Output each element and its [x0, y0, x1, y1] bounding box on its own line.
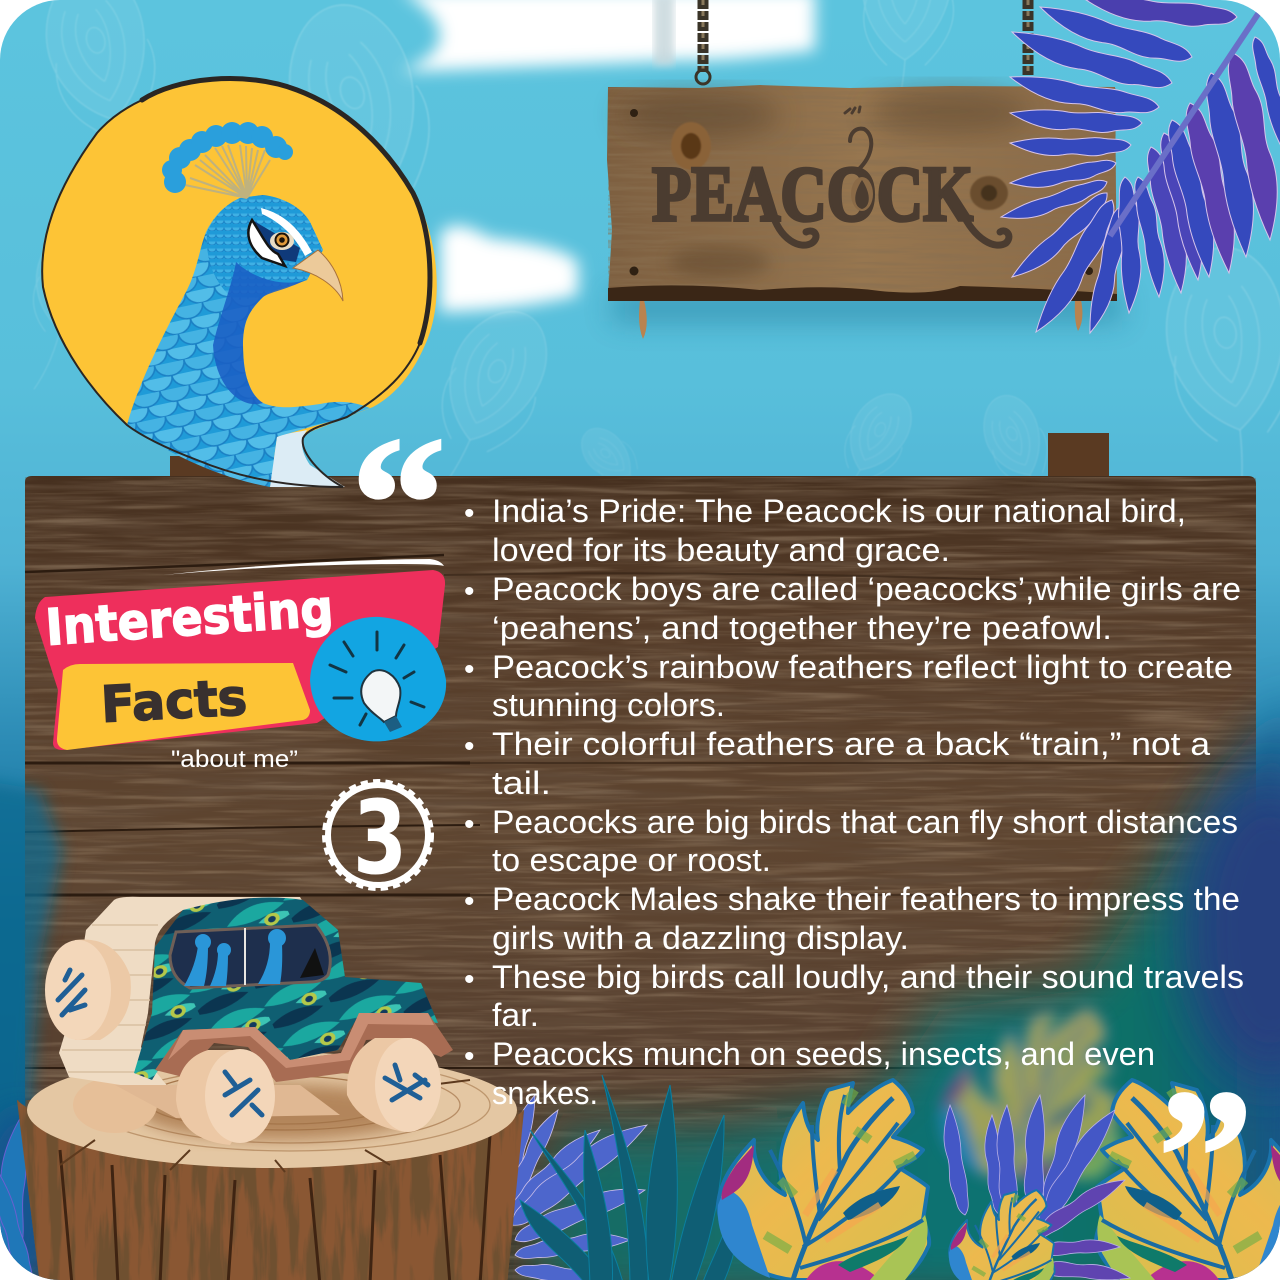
- hanging sign: [607, 0, 1122, 339]
- wheel emblem: [225, 1072, 262, 1115]
- yellow banner: [57, 663, 310, 750]
- fact four: tail.: [492, 765, 551, 801]
- body ribs: [62, 925, 158, 1072]
- about me caption: "about me”: [171, 746, 298, 773]
- peacock body: [127, 195, 370, 487]
- fact six: girls with a dazzling display.: [492, 920, 909, 956]
- lower chassis: [115, 1085, 340, 1118]
- panel grain: [25, 477, 1256, 1280]
- wheel emblem: [385, 1065, 428, 1100]
- tree stump: [10, 1052, 530, 1280]
- fact seven: •: [464, 963, 475, 996]
- feather wrap: [134, 898, 438, 1080]
- white flourish: [163, 559, 444, 575]
- window peacocks: [184, 929, 286, 986]
- middle frond: [939, 1091, 1131, 1280]
- fact six: [464, 881, 1240, 956]
- head scales: [207, 195, 323, 300]
- panel colour fades: [0, 780, 62, 1280]
- number: 3: [353, 779, 407, 898]
- opening quote mark: “: [351, 399, 446, 609]
- palm leaf top right: [999, 0, 1280, 339]
- fact one: India’s Pride: The Peacock is our national bird,: [492, 493, 1186, 529]
- fact two: •: [464, 575, 475, 608]
- heading word one: Interesting: [44, 579, 335, 657]
- fact five: to escape or roost.: [492, 842, 771, 878]
- closing quote mark: ”: [1158, 1052, 1253, 1262]
- fact five: Peacocks are big birds that can fly short distances: [492, 804, 1238, 840]
- left frond: [0, 1118, 32, 1274]
- small centre leaf: [949, 1190, 1055, 1280]
- wood knots: [630, 109, 1093, 276]
- heading word two: Facts: [100, 668, 248, 734]
- fact two: ‘peahens’, and together they’re peafowl.: [492, 610, 1112, 646]
- outline: [42, 79, 430, 487]
- face mask: [248, 208, 312, 266]
- wing belly: [270, 430, 345, 487]
- bulb icon: [310, 617, 446, 741]
- blurred background monstera: [940, 1008, 1120, 1178]
- fact seven: These big birds call loudly, and their sound travels: [492, 959, 1244, 995]
- fact five: [464, 804, 1238, 878]
- board burns: [608, 285, 1117, 301]
- clouds: [400, 0, 815, 312]
- cloud post shadow: [654, 0, 674, 65]
- fact four: [464, 726, 1210, 801]
- fact eight: [464, 1036, 1155, 1111]
- monstera right: [1096, 1080, 1280, 1280]
- monstera left: [718, 1080, 929, 1280]
- fact three: •: [464, 653, 475, 686]
- fact six: •: [464, 885, 475, 918]
- fact one: •: [464, 497, 475, 530]
- rear wheel: [176, 1049, 275, 1145]
- fact three: [464, 649, 1233, 723]
- wood posts: [170, 433, 1109, 480]
- blue frond: [512, 1096, 648, 1280]
- sign shadow: [612, 292, 1122, 322]
- fact two: Peacock boys are called ‘peacocks’,while girls are: [492, 571, 1241, 607]
- wooden toy car: [45, 897, 453, 1145]
- sign title: PEACOCK: [652, 150, 973, 237]
- panel base: [25, 476, 1256, 1280]
- peacock speech bubble: [42, 79, 437, 487]
- bark texture: [10, 1095, 530, 1280]
- dark agave: [520, 1075, 738, 1280]
- warm stump shadow: [140, 1084, 420, 1140]
- bottom foliage: [0, 1075, 1280, 1280]
- neck shading: [213, 262, 306, 404]
- fact four: Their colorful feathers are a back “train,” not a: [492, 726, 1210, 762]
- fact two: [464, 571, 1241, 646]
- fact seven: far.: [492, 997, 539, 1033]
- front wheel: [347, 1038, 441, 1132]
- plank lines: [25, 555, 1256, 1068]
- fact eight: Peacocks munch on seeds, insects, and even: [492, 1036, 1155, 1072]
- wheel emblem: [58, 970, 85, 1015]
- heading badge: [35, 559, 446, 773]
- wood board: [607, 85, 1117, 300]
- number badge: [326, 779, 430, 898]
- growth rings: [60, 1059, 490, 1172]
- trunk: [17, 1100, 524, 1280]
- beak: [293, 250, 343, 301]
- title swashes and peacock mark: [772, 107, 1009, 245]
- sign drips: [639, 300, 1082, 339]
- brown rail: [155, 1013, 453, 1082]
- fact five: •: [464, 808, 475, 841]
- stump top: [27, 1052, 517, 1168]
- window: [170, 925, 330, 988]
- chains: [696, 0, 1028, 86]
- feather watermarks: [32, 0, 1280, 476]
- rear under wheel: [73, 1077, 157, 1133]
- wooden panel: [0, 476, 1280, 1280]
- facts list: [464, 493, 1244, 1111]
- red banner: [35, 570, 445, 750]
- yellow disc: [42, 79, 437, 470]
- fact six: Peacock Males shake their feathers to impress the: [492, 881, 1240, 917]
- fact eight: snakes.: [492, 1075, 598, 1111]
- rear wood body: [59, 897, 303, 1088]
- fact seven: [464, 959, 1244, 1033]
- fact eight: •: [464, 1040, 475, 1073]
- crest: [162, 122, 293, 198]
- board grain: [608, 88, 1116, 296]
- spare wheel: [45, 939, 131, 1040]
- fact four: •: [464, 730, 475, 763]
- fact one: loved for its beauty and grace.: [492, 532, 950, 568]
- fact three: Peacock’s rainbow feathers reflect light to create: [492, 649, 1233, 685]
- fact three: stunning colors.: [492, 687, 725, 723]
- eye: [270, 232, 294, 250]
- fact one: [464, 493, 1186, 568]
